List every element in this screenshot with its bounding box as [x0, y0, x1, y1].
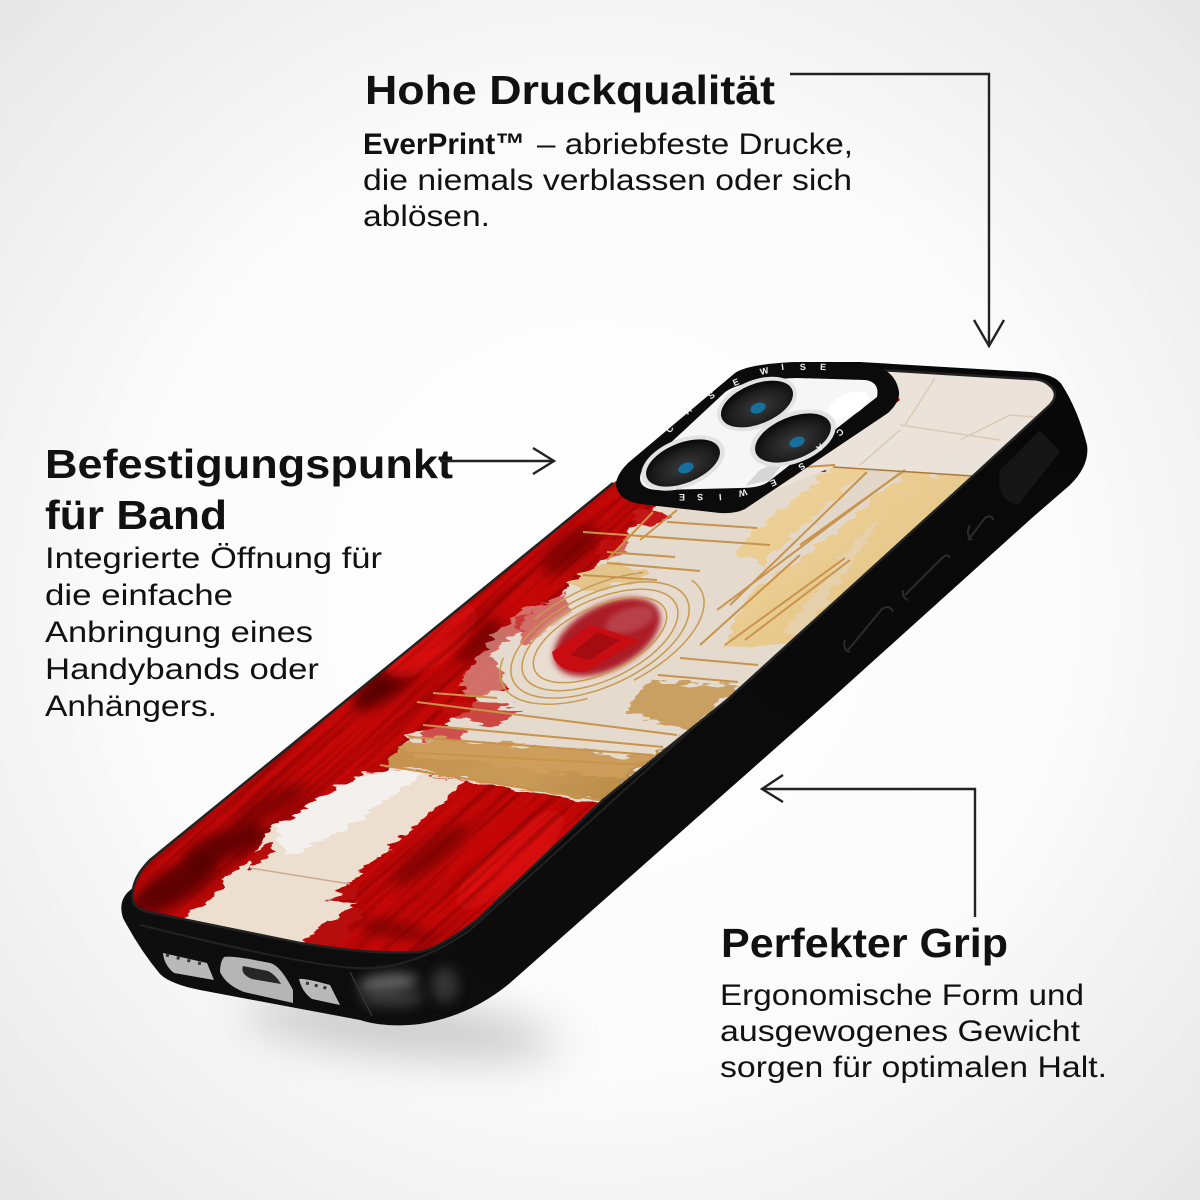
rings — [499, 572, 705, 705]
text: strap attachment: Handybands oder — [45, 653, 319, 686]
arrow: strap attachment — [440, 448, 554, 474]
heading: strap attachment: für Band — [45, 492, 227, 538]
text: strap attachment — [45, 542, 382, 723]
lens right — [742, 398, 844, 478]
central red circle — [549, 593, 665, 681]
ring lettering: E — [768, 477, 778, 489]
ring lettering: I — [781, 362, 785, 372]
ring lettering: W — [737, 487, 748, 499]
callout: print quality — [363, 67, 853, 233]
heading: strap attachment: Befestigungspunkt — [45, 441, 453, 487]
ring lettering: S — [796, 461, 807, 472]
cream mid section — [385, 467, 985, 805]
gold patch left — [567, 563, 645, 592]
text: strap attachment: die einfache — [45, 579, 233, 612]
case body — [121, 362, 1087, 1025]
ring lettering: E — [731, 376, 741, 388]
ring lettering: C — [834, 426, 846, 438]
dark red blotches — [123, 517, 606, 945]
text: print quality: EverPrint™ — [363, 128, 525, 161]
lens top — [709, 366, 805, 442]
callout: strap attachment — [45, 441, 453, 723]
text: print quality: die niemals verblassen oder sich — [363, 164, 852, 197]
ring lettering: I — [719, 492, 722, 502]
arrow: grip — [762, 775, 975, 917]
gold lines — [380, 465, 973, 800]
heading: print quality: Hohe Druckqualität — [365, 67, 775, 113]
top cream section — [775, 365, 1060, 490]
ring lettering: E — [820, 362, 826, 372]
bright red area — [378, 603, 483, 686]
ring lettering: A — [814, 441, 825, 454]
brush texture — [134, 398, 899, 952]
red flecks in stripe — [245, 842, 360, 945]
painted areas — [183, 467, 985, 945]
side buttons — [844, 430, 1060, 652]
gold band — [380, 735, 683, 802]
ring lettering: E — [679, 492, 685, 502]
red scuffs in cream — [420, 512, 672, 742]
phone case — [121, 362, 1088, 1026]
text: print quality — [363, 128, 853, 233]
big gold patch upper — [722, 467, 973, 650]
text: print quality: – abriebfeste Drucke, — [537, 128, 853, 161]
text: strap attachment: Anbringung eines — [45, 616, 313, 649]
callout: grip — [720, 920, 1107, 1084]
camera glass — [640, 378, 878, 490]
speaker left — [163, 953, 214, 980]
lens left — [633, 424, 733, 502]
text: grip: ausgewogenes Gewicht — [720, 1015, 1081, 1048]
heading: strap attachment — [45, 441, 453, 538]
camera ring — [616, 362, 899, 513]
central halo — [528, 608, 572, 644]
heading: grip: Perfekter Grip — [721, 920, 1008, 966]
text: grip: sorgen für optimalen Halt. — [720, 1051, 1107, 1084]
charging port — [220, 957, 293, 1003]
red base — [134, 398, 900, 952]
case corner highlight — [140, 450, 1000, 1016]
ring lettering: S — [800, 362, 806, 372]
ring lettering — [664, 362, 846, 502]
artwork rim — [133, 370, 1055, 953]
cream stripes in gold — [750, 470, 905, 640]
artwork print — [134, 372, 1054, 952]
ring lettering: A — [682, 405, 694, 417]
text: print quality: ablösen. — [363, 200, 490, 233]
phone shadow — [238, 985, 562, 1071]
gold patch lower right — [627, 680, 737, 730]
cream stripe lower — [183, 767, 463, 945]
text: strap attachment: Anhängers. — [45, 690, 217, 723]
text: grip: Ergonomische Form und — [720, 979, 1084, 1012]
text: grip — [720, 979, 1107, 1084]
ring lettering: C — [664, 423, 676, 435]
pink scuffed area — [458, 600, 551, 696]
camera island — [616, 362, 899, 513]
text: strap attachment: Integrierte Öffnung für — [45, 542, 382, 575]
white highlight — [277, 768, 420, 855]
speaker right — [299, 979, 340, 1005]
arrow: print quality — [790, 74, 1004, 346]
ring lettering: S — [706, 390, 717, 401]
ring lettering: S — [697, 492, 703, 502]
ring lettering: W — [759, 365, 770, 377]
